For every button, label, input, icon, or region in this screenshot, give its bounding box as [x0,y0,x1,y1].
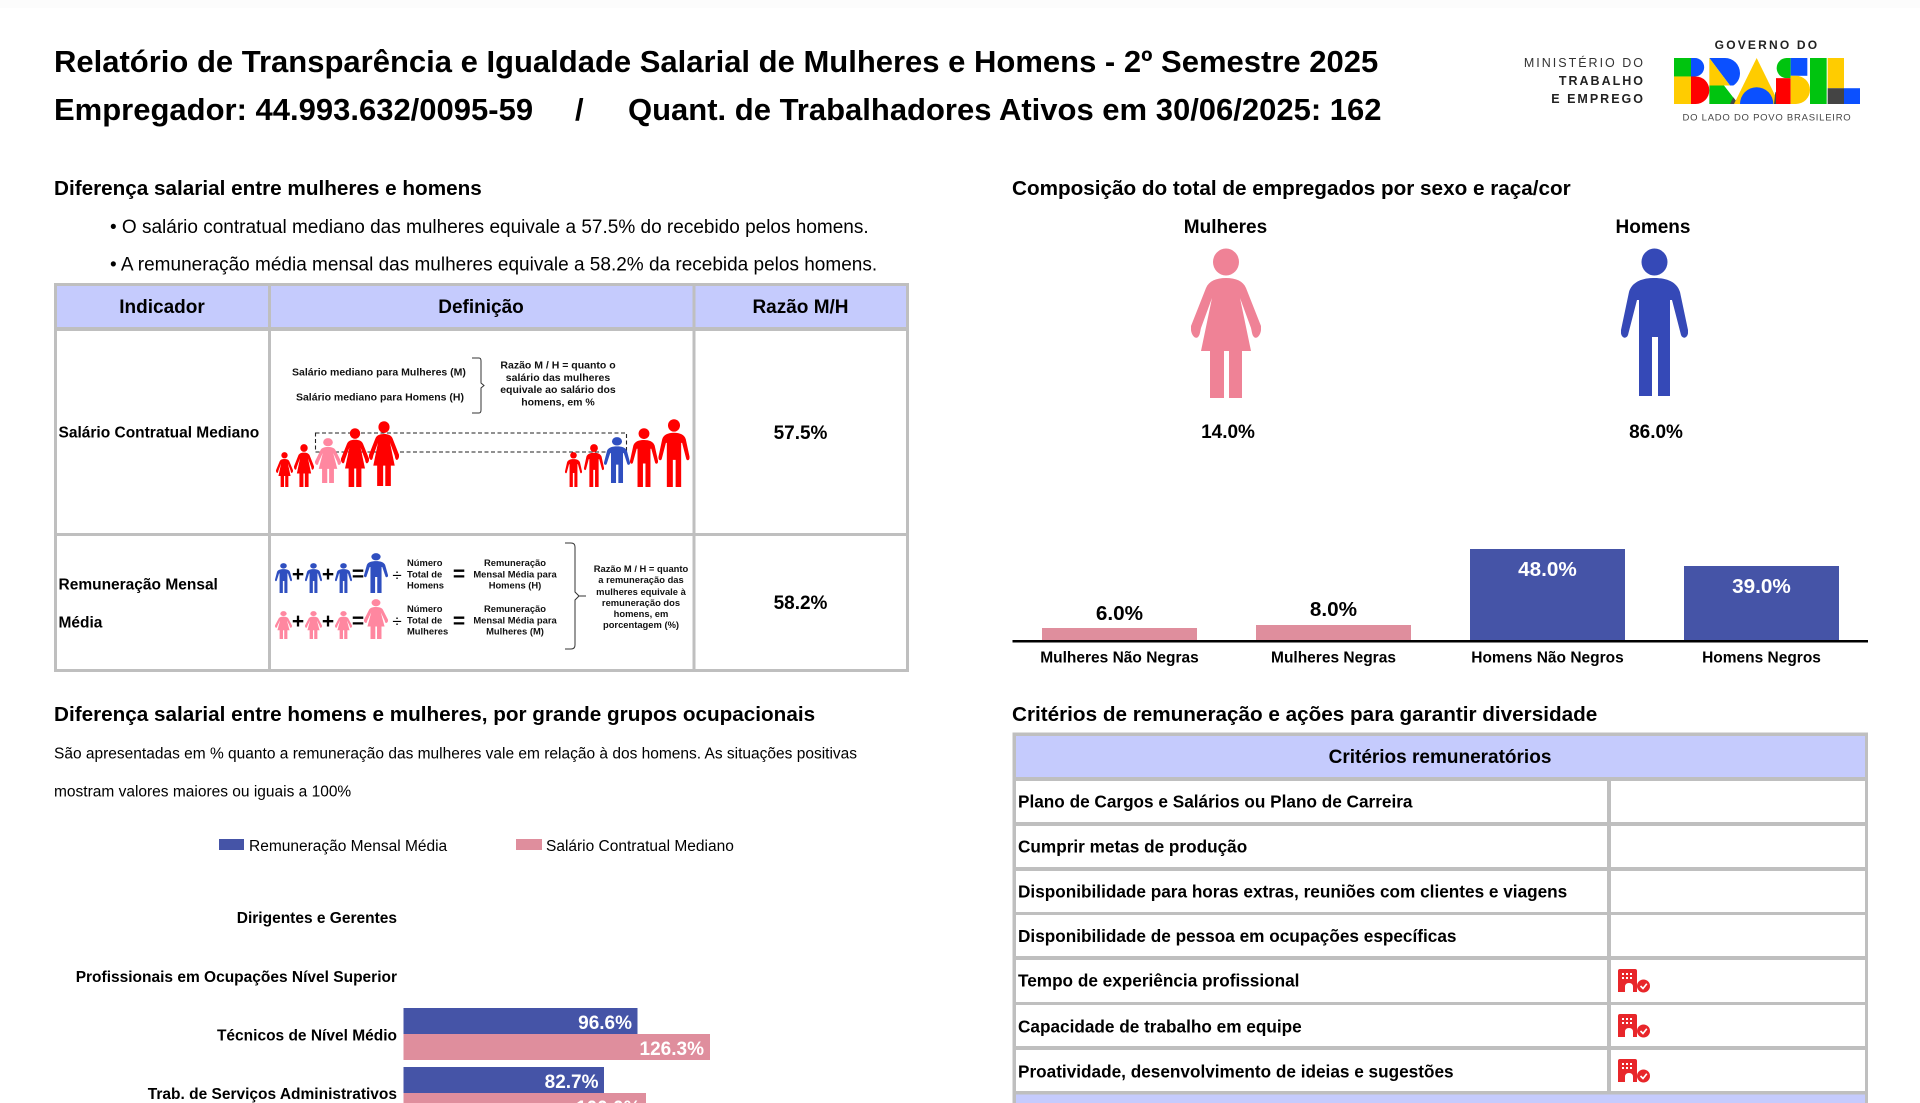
row: salário contratual mediano: Salário Contratual Mediano [58,424,259,442]
heading: Critérios de remuneração e ações para garantir diversidade [1012,703,1597,726]
legend: Salário Contratual Mediano [546,838,734,855]
diagram: remuneração média: Mulheres (M) [486,626,544,636]
row: remuneração mensal média [58,576,828,632]
table header [119,297,849,318]
bullet text: • O salário contratual mediano das mulheres equivale a 57.5% do recebido pelos homens. [110,217,869,238]
bar chart: sexo e raça/cor: Mulheres Negras [1271,650,1396,666]
heading: Diferença salarial entre homens e mulheres, por grande grupos ocupacionais [54,703,815,726]
faint top strip [0,0,1920,8]
row: salário contratual mediano: 57.5% [774,423,828,444]
heading: Composição do total de empregados por sexo e raça/cor [1012,177,1571,200]
criteria rows: Plano de Cargos e Salários ou Plano de Carreira [1018,792,1413,812]
diagram: salário mediano: Razão M / H = quanto o [500,360,616,372]
criteria rows: Disponibilidade para horas extras, reuniões com clientes e viagens [1018,882,1567,902]
diagram: remuneração média: Homens (H) [489,580,541,590]
table: critérios remuneratórios: Critérios remuneratórios [1329,747,1551,768]
woman figure with share: Mulheres [1184,217,1267,238]
panel: composição do total de empregados [1012,177,1868,666]
criteria rows: Cumprir metas de produção [1018,836,1247,856]
bullet text: • A remuneração média mensal das mulheres equivale a 58.2% da recebida pelos homens. [110,254,877,276]
diagram: remuneração média: Mensal Média para [473,614,557,626]
diagram: remuneração média: ÷ [392,566,402,585]
diagram: remuneração média: homens, em [614,608,668,619]
diagram: remuneração média: = [352,563,364,586]
table header: Definição [438,297,524,318]
table header: Razão M/H [752,297,849,318]
horizontal bar chart: Técnicos de Nível Médio [217,1028,397,1044]
description: São apresentadas em % quanto a remuneração das mulheres vale em relação à dos homens. As situações positivas [54,746,857,762]
bar chart: sexo e raça/cor: Mulheres Não Negras [1040,650,1199,666]
diagram: salário mediano [276,358,690,487]
logo: ministério do trabalho e emprego: TRABALHO [1559,74,1645,88]
diagram: remuneração média: = [453,610,465,633]
legend: Remuneração Mensal Média [249,838,448,855]
diagram: remuneração média: Número [407,603,443,614]
icon: building check 1 [1618,969,1650,992]
icon: building check 3 [1618,1059,1650,1082]
row: salário contratual mediano [58,423,828,444]
criteria rows: Disponibilidade de pessoa em ocupações específicas [1018,926,1456,946]
diagram: remuneração média: Total de [407,614,442,626]
icon: building check 2 [1618,1014,1650,1038]
table header: Indicador [119,297,205,318]
logo: governo do brasil: DO LADO DO POVO BRASILEIRO [1683,112,1851,124]
bar chart: sexo e raça/cor: Homens Não Negros [1471,650,1624,666]
diagram: remuneração média: mulheres equivale à [596,586,687,597]
horizontal bar chart: 82.7% [545,1072,599,1093]
man figure with share [1616,217,1690,443]
diagram: remuneração média: ÷ [392,612,402,631]
bar chart: sexo e raça/cor: 39.0% [1732,575,1791,598]
horizontal bar chart [76,910,710,1103]
diagram: remuneração média: Razão M / H = quanto [594,563,689,574]
bar chart: sexo e raça/cor: 8.0% [1310,598,1357,621]
diagram: remuneração média: Mensal Média para [473,568,557,580]
bar chart: sexo e raça/cor [1012,549,1868,666]
diagram: remuneração média: = [453,563,465,586]
diagram: remuneração média: + [322,610,334,633]
diagram: remuneração média: Homens [407,580,444,590]
diagram: remuneração média: Número [407,557,443,568]
diagram: salário mediano: salário das mulheres [506,372,610,384]
diagram: remuneração média: = [352,610,364,633]
horizontal bar chart: Trab. de Serviços Administrativos [148,1086,397,1103]
logo: governo do brasil [1674,38,1860,124]
title: Quant. de Trabalhadores Ativos em 30/06/2025: 162 [628,92,1382,127]
title: / [575,92,584,127]
row: remuneração mensal média: 58.2% [774,593,828,614]
diagram: remuneração média: Remuneração [484,603,546,614]
title: Relatório de Transparência e Igualdade Salarial de Mulheres e Homens - 2º Semestre 2025 [54,44,1378,79]
diagram: remuneração média: + [322,563,334,586]
diagram: remuneração média: Remuneração [484,557,546,568]
row: remuneração mensal média: Remuneração Mensal [58,576,218,594]
horizontal bar chart: Dirigentes e Gerentes [237,910,397,927]
heading: Diferença salarial entre mulheres e homens [54,177,482,200]
diagram: salário mediano: equivale ao salário dos [500,384,616,396]
woman figure with share: 14.0% [1201,422,1255,443]
diagram: remuneração média: + [292,610,304,633]
criteria rows: Proatividade, desenvolvimento de ideias e sugestões [1018,1062,1454,1082]
diagram: salário mediano: Salário mediano para Homens (H) [296,392,464,404]
horizontal bar chart: Profissionais em Ocupações Nível Superior [76,969,397,986]
panel: critérios de remuneração [1012,703,1868,1103]
horizontal bar chart: 96.6% [578,1013,632,1034]
row: remuneração mensal média: Média [58,614,103,632]
title [54,44,1382,127]
diagram: remuneração média: remuneração dos [602,597,680,608]
table: indicadores [54,283,909,672]
logo: ministério do trabalho e emprego: MINISTÉRIO DO [1524,55,1645,70]
criteria rows [1018,792,1567,1082]
criteria rows: Capacidade de trabalho em equipe [1018,1016,1302,1036]
diagram: remuneração média: porcentagem (%) [603,619,679,630]
table: critérios remuneratórios [1012,732,1868,1103]
logo: ministério do trabalho e emprego: E EMPREGO [1551,92,1645,106]
logo: ministério do trabalho e emprego [1524,55,1645,106]
diagram: remuneração média: Mulheres [407,626,448,636]
panel: diferença por grandes grupos ocupacionais [54,703,857,1103]
diagram: salário mediano: Salário mediano para Mulheres (M) [292,366,466,378]
panel: diferença salarial entre mulheres e homens [54,177,909,672]
diagram: remuneração média: Total de [407,568,442,580]
bar chart: sexo e raça/cor: 48.0% [1518,558,1577,581]
legend [219,838,734,855]
bar chart: sexo e raça/cor: 6.0% [1096,602,1143,625]
title: Empregador: 44.993.632/0095-59 [54,92,533,127]
diagram: salário mediano: homens, em % [521,396,595,408]
woman figure with share [1184,217,1267,443]
description [54,746,857,800]
man figure with share: Homens [1616,217,1690,238]
bar chart: sexo e raça/cor: Homens Negros [1702,650,1821,666]
criteria rows: Tempo de experiência profissional [1018,970,1299,990]
diagram: remuneração média [275,543,689,649]
horizontal bar chart: 126.3% [640,1039,704,1060]
logo: governo do brasil: GOVERNO DO [1715,38,1819,52]
diagram: remuneração média: + [292,563,304,586]
description: mostram valores maiores ou iguais a 100% [54,784,351,800]
bullet text [110,217,877,276]
man figure with share: 86.0% [1629,422,1683,443]
diagram: remuneração média: a remuneração das [598,574,684,585]
